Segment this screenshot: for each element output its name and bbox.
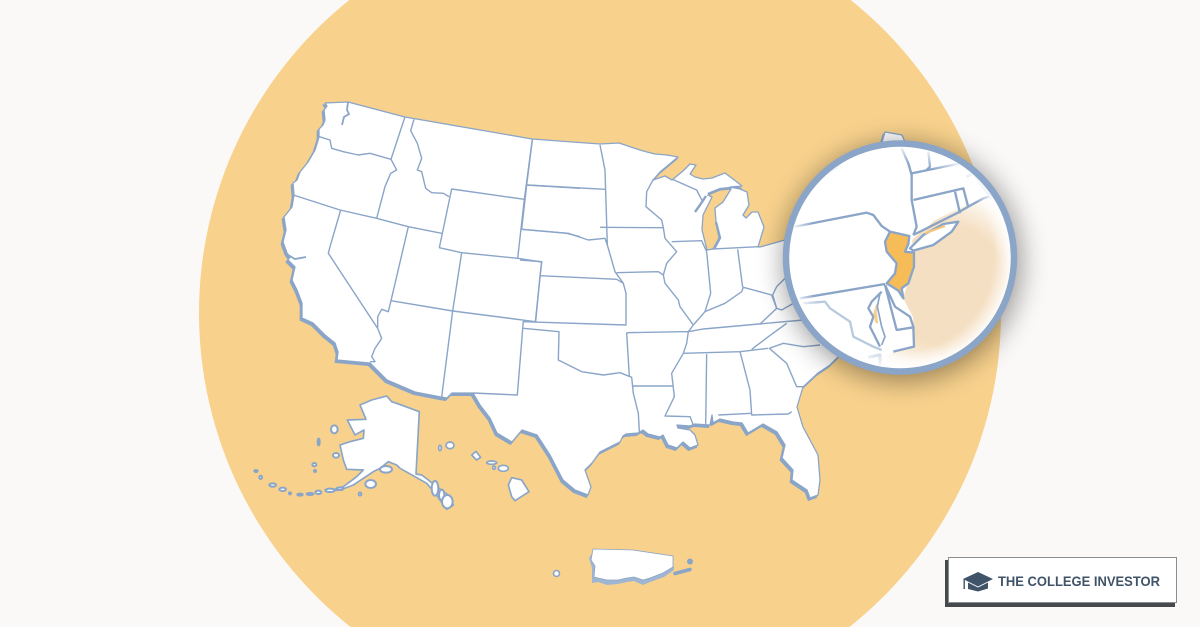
puerto rico shadow — [589, 552, 674, 585]
icon: graduation cap — [963, 572, 993, 592]
lake michigan — [702, 189, 731, 250]
state: new jersey — [885, 232, 914, 298]
puerto rico island — [591, 549, 673, 580]
atlantic water — [888, 201, 1010, 363]
kauai — [446, 442, 454, 449]
mona island — [554, 570, 560, 576]
map: alaska — [254, 396, 453, 509]
map: puerto rico — [554, 549, 693, 585]
long island sound sliver — [925, 226, 945, 233]
maui — [498, 465, 508, 471]
land — [283, 102, 905, 498]
big island — [508, 478, 529, 501]
map: hawaii — [439, 442, 529, 501]
badge shadow — [945, 560, 1175, 607]
kahoolawe — [493, 466, 495, 469]
alaska mainland — [330, 396, 453, 509]
coast shadow — [281, 104, 903, 500]
molokai and lanai — [487, 461, 497, 464]
culebra — [687, 558, 693, 564]
central and eastern state borders — [520, 140, 820, 432]
badge panel — [948, 558, 1176, 602]
magnified state lines — [795, 148, 993, 365]
magnifier shadow — [784, 144, 1020, 380]
long island — [910, 222, 958, 251]
orange background circle — [199, 0, 1001, 627]
magnifier: new jersey close-up — [782, 140, 1018, 375]
inner edge glow — [788, 146, 1012, 370]
puget sound — [342, 102, 349, 125]
vieques — [675, 570, 690, 574]
eastern shore — [877, 293, 885, 345]
lens ring — [786, 144, 1014, 372]
logo badge — [945, 558, 1176, 607]
western state borders — [293, 117, 580, 397]
san francisco bay — [288, 255, 306, 259]
chesapeake bay — [868, 292, 885, 347]
oahu — [472, 451, 481, 460]
map: contiguous United States — [281, 102, 905, 500]
bay water — [873, 302, 879, 324]
lens land — [788, 146, 1012, 370]
alaska islands — [254, 425, 453, 508]
western shore — [868, 292, 882, 347]
lens contents — [795, 148, 1010, 365]
brand name: THE COLLEGE INVESTOR — [998, 573, 1160, 589]
lake michigan north and east shore — [695, 188, 731, 249]
niihau — [439, 445, 441, 451]
